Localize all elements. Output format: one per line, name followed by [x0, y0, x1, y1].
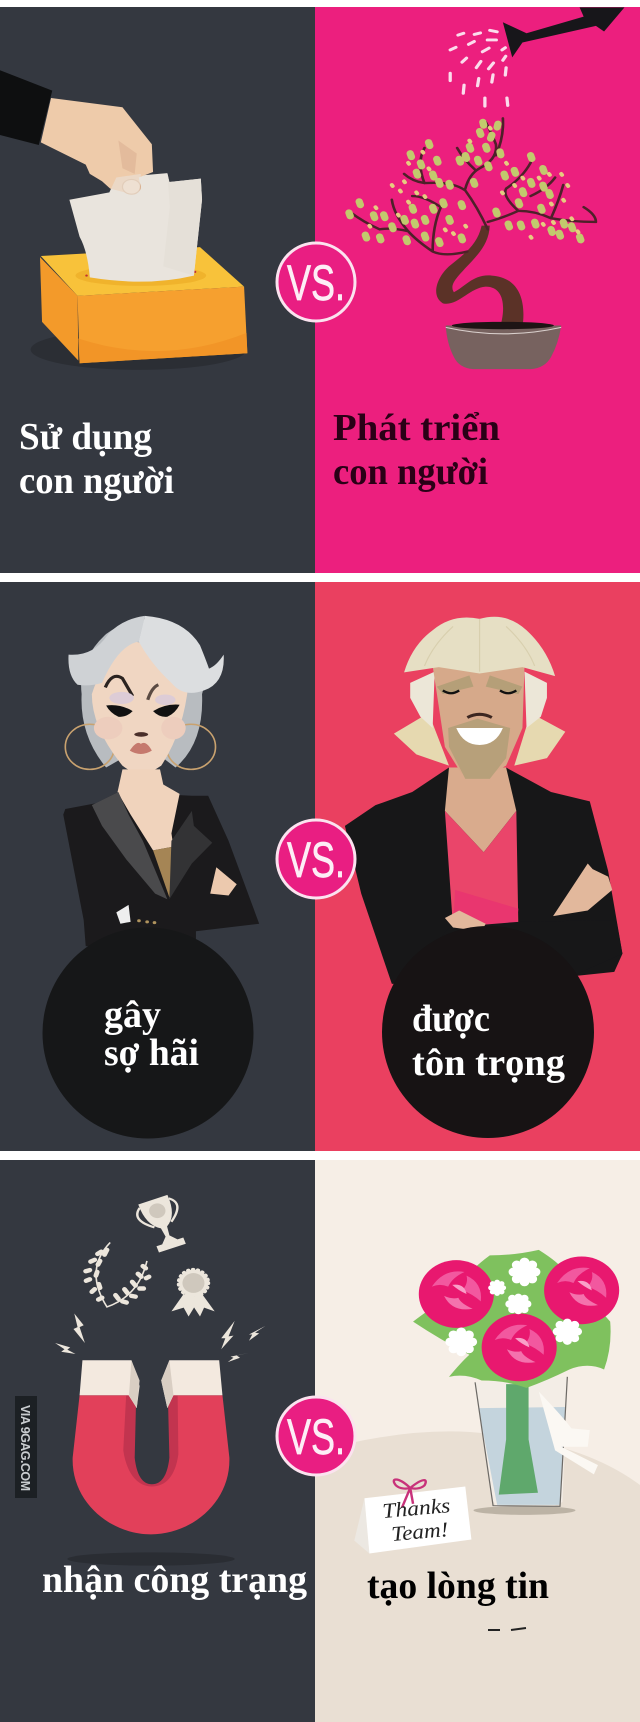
- illustration: laurel wreath: [86, 1243, 149, 1307]
- text: Phát triển con người: con người: [333, 451, 488, 493]
- badge: VS row 1: VS.: [287, 256, 345, 311]
- text: Sử dụng con người: [19, 416, 174, 502]
- text: gây sợ hãi: sợ hãi: [104, 1032, 199, 1074]
- illustration: watering can and water drops: [450, 7, 624, 106]
- table surface: [315, 1431, 640, 1722]
- text: gây sợ hãi: gây: [104, 994, 161, 1036]
- illustration: flowers in glass vase: [413, 1250, 619, 1515]
- ball: black circle behind được tôn trọng: [382, 926, 594, 1138]
- watermark: via 9gag.com: VIA 9GAG.COM: [18, 1405, 32, 1491]
- ball: black circle behind gây sợ hãi: [42, 928, 254, 1138]
- illustration: horseshoe magnet: [67, 1360, 235, 1566]
- text: được tôn trọng: [412, 998, 565, 1084]
- illustration: Thanks Team card with bow: Thanks: [381, 1493, 451, 1523]
- panel: row 2 left background: [0, 582, 315, 1151]
- badge: VS row 2: VS.: [287, 833, 345, 888]
- smudge mark: [488, 1628, 526, 1630]
- text: Sử dụng con người: con người: [19, 460, 174, 502]
- illustration: smiling man with crossed arms: [345, 617, 622, 984]
- text: gây sợ hãi: [104, 994, 199, 1074]
- illustration: trophy: [133, 1193, 192, 1254]
- icon: magnet spark bolts: [55, 1314, 265, 1362]
- illustration: hand pulling tissue from box: [0, 70, 247, 370]
- illustration: rosette award: [171, 1270, 215, 1316]
- illustration: Thanks Team card with bow: Team!: [390, 1517, 449, 1546]
- badge: VS row 3: VS.: [287, 1410, 345, 1465]
- watermark: via 9gag.com: [15, 1396, 37, 1498]
- panel: row 1 left background: [0, 7, 315, 573]
- panel: row 3 left background: [0, 1160, 315, 1722]
- panel: row 1 right background: [315, 7, 640, 573]
- text: Phát triển con người: Phát triển: [333, 407, 500, 449]
- text: được tôn trọng: được: [412, 998, 490, 1040]
- illustration: stern woman with crossed arms: [63, 616, 259, 946]
- panel: row 2 right background: [315, 582, 640, 1151]
- text: được tôn trọng: tôn trọng: [412, 1042, 565, 1084]
- illustration: bonsai tree in pot: [349, 118, 596, 369]
- text: Sử dụng con người: Sử dụng: [19, 416, 152, 458]
- text: nhận công trạng: nhận công trạng: [42, 1559, 307, 1601]
- illustration: Thanks Team card with bow: [354, 1479, 471, 1553]
- panel: row 3 right background: [315, 1160, 640, 1722]
- badge: VS row 2: [277, 820, 355, 898]
- text: Phát triển con người: [333, 407, 500, 493]
- text: tạo lòng tin: tạo lòng tin: [367, 1565, 549, 1607]
- badge: VS row 1: [277, 243, 355, 321]
- badge: VS row 3: [277, 1397, 355, 1475]
